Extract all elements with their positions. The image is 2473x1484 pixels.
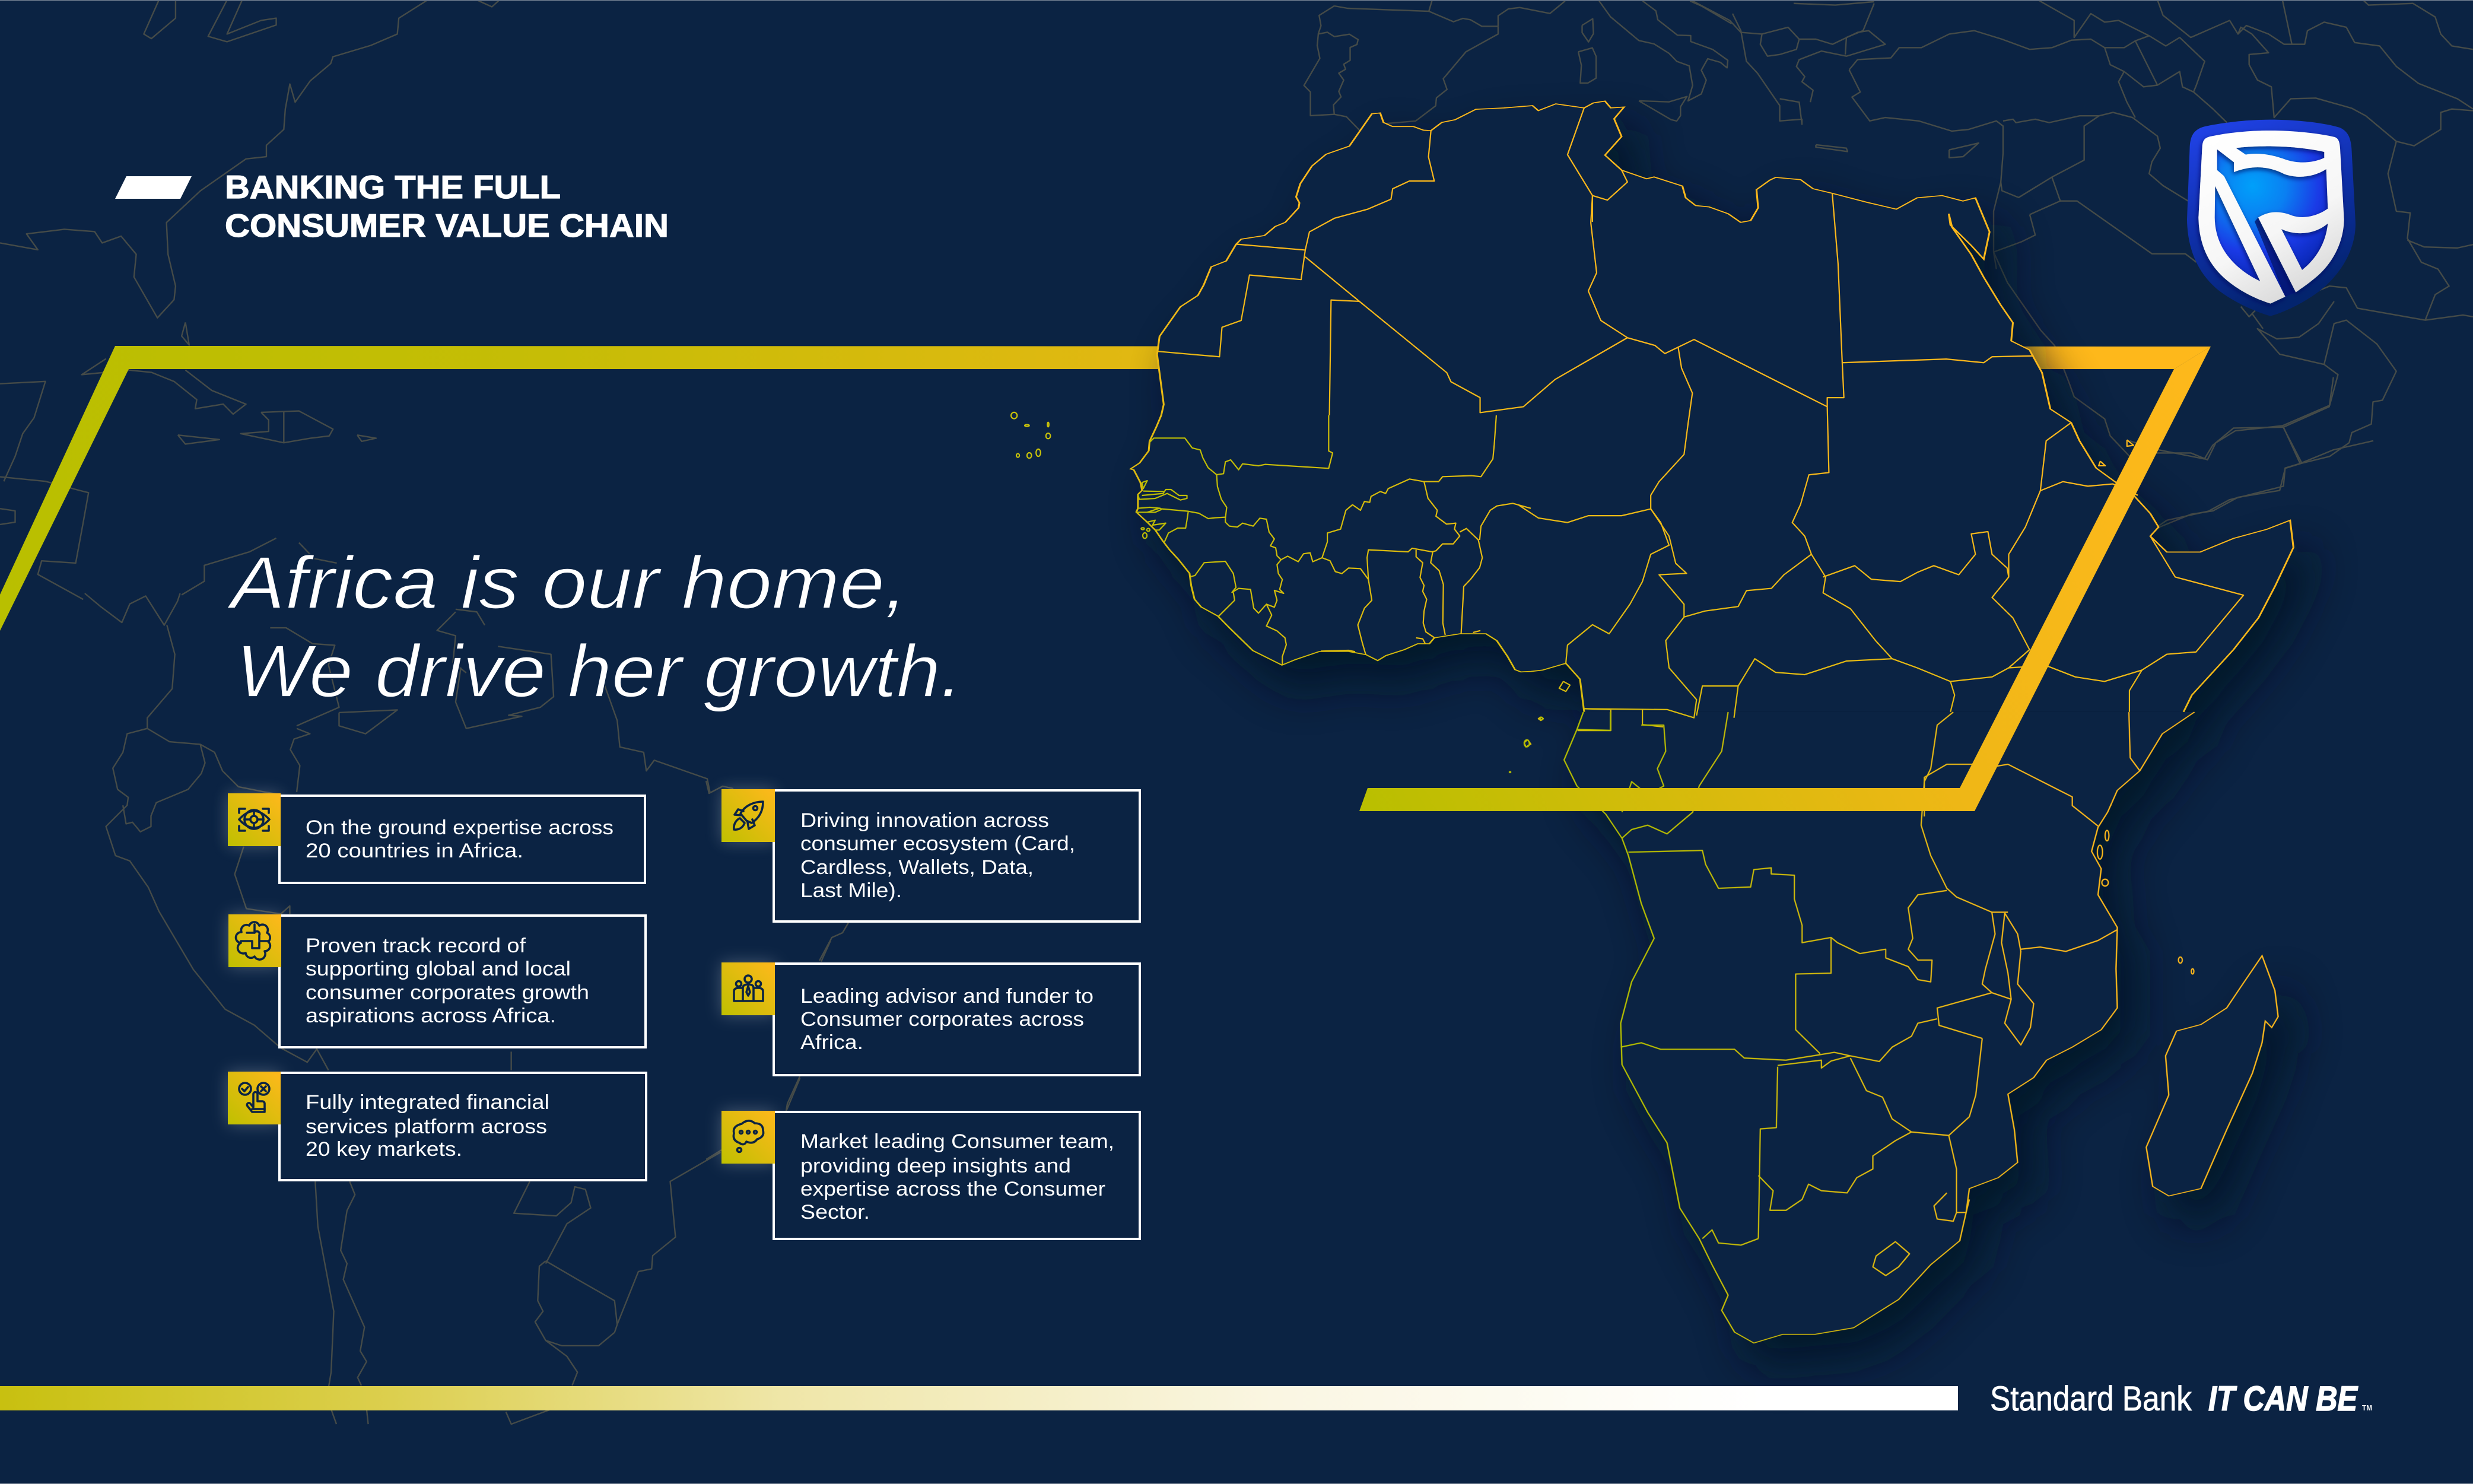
footer wordmark: TM — [2362, 1403, 2372, 1412]
logo: standard bank shield — [2187, 120, 2356, 316]
heading — [225, 169, 669, 244]
card: proven track record: Proven track record of — [306, 935, 526, 957]
card: driving innovation: Driving innovation across — [800, 809, 1049, 832]
bottom edge line — [0, 1483, 2473, 1484]
card: on the ground expertise: 20 countries in Africa. — [306, 840, 523, 862]
world map outline: Europe, Middle East and Asia — [1691, 0, 2473, 532]
heading: CONSUMER VALUE CHAIN — [225, 207, 669, 244]
card: market leading team: expertise across the Consumer — [800, 1178, 1105, 1200]
footer wordmark: IT CAN BE — [2208, 1380, 2358, 1418]
africa map north: borders — [1130, 101, 2293, 747]
top gold frame bar — [0, 346, 2211, 631]
cape verde islands — [1011, 412, 1050, 458]
card: proven track record: aspirations across Africa. — [306, 1005, 556, 1027]
card: leading advisor: Consumer corporates across — [800, 1008, 1084, 1031]
world map outline: Iberia and Italy — [1304, 1, 1731, 132]
card: on the ground expertise — [228, 793, 645, 883]
main title: Africa is our home, — [226, 542, 907, 624]
card: fully integrated platform: Fully integrated financial — [306, 1091, 549, 1114]
top edge line — [0, 0, 2473, 1]
card: driving innovation — [721, 789, 1140, 921]
slanted and lower gold frame bar — [1359, 347, 2211, 811]
africa map west: west african borders — [1137, 415, 1531, 665]
africa land fill — [1130, 101, 2293, 1343]
card: driving innovation: consumer ecosystem (Card, — [800, 832, 1075, 855]
card: market leading team: Sector. — [800, 1201, 870, 1224]
card: proven track record: consumer corporates growth — [306, 981, 589, 1004]
footer wordmark — [1990, 1380, 2372, 1418]
africa drop shadow — [1149, 127, 2312, 1369]
card: leading advisor: Leading advisor and funder to — [800, 985, 1094, 1008]
card: proven track record — [228, 914, 646, 1047]
card: fully integrated platform: 20 key markets. — [306, 1138, 462, 1161]
card: driving innovation: Cardless, Wallets, Data, — [800, 856, 1034, 879]
africa map south: borders and madagascar — [1509, 712, 2278, 1343]
heading: BANKING THE FULL — [225, 169, 561, 205]
card: driving innovation: Last Mile). — [800, 879, 902, 902]
card: leading advisor — [721, 962, 1140, 1075]
card: market leading team — [721, 1111, 1140, 1239]
main title: We drive her growth. — [236, 630, 962, 713]
heading marker — [115, 176, 192, 199]
card: fully integrated platform — [228, 1072, 646, 1180]
card: market leading team: providing deep insights and — [800, 1155, 1071, 1177]
footer wordmark: Standard Bank — [1990, 1380, 2192, 1418]
card: on the ground expertise: On the ground expertise across — [306, 816, 614, 839]
card: proven track record: supporting global and local — [306, 958, 571, 980]
footer gradient bar — [0, 1386, 1958, 1410]
card: market leading team: Market leading Consumer team, — [800, 1130, 1114, 1153]
card: leading advisor: Africa. — [800, 1031, 863, 1054]
world map outline: Americas — [0, 0, 848, 1424]
card: fully integrated platform: services platform across — [306, 1116, 547, 1138]
main title — [226, 542, 962, 713]
